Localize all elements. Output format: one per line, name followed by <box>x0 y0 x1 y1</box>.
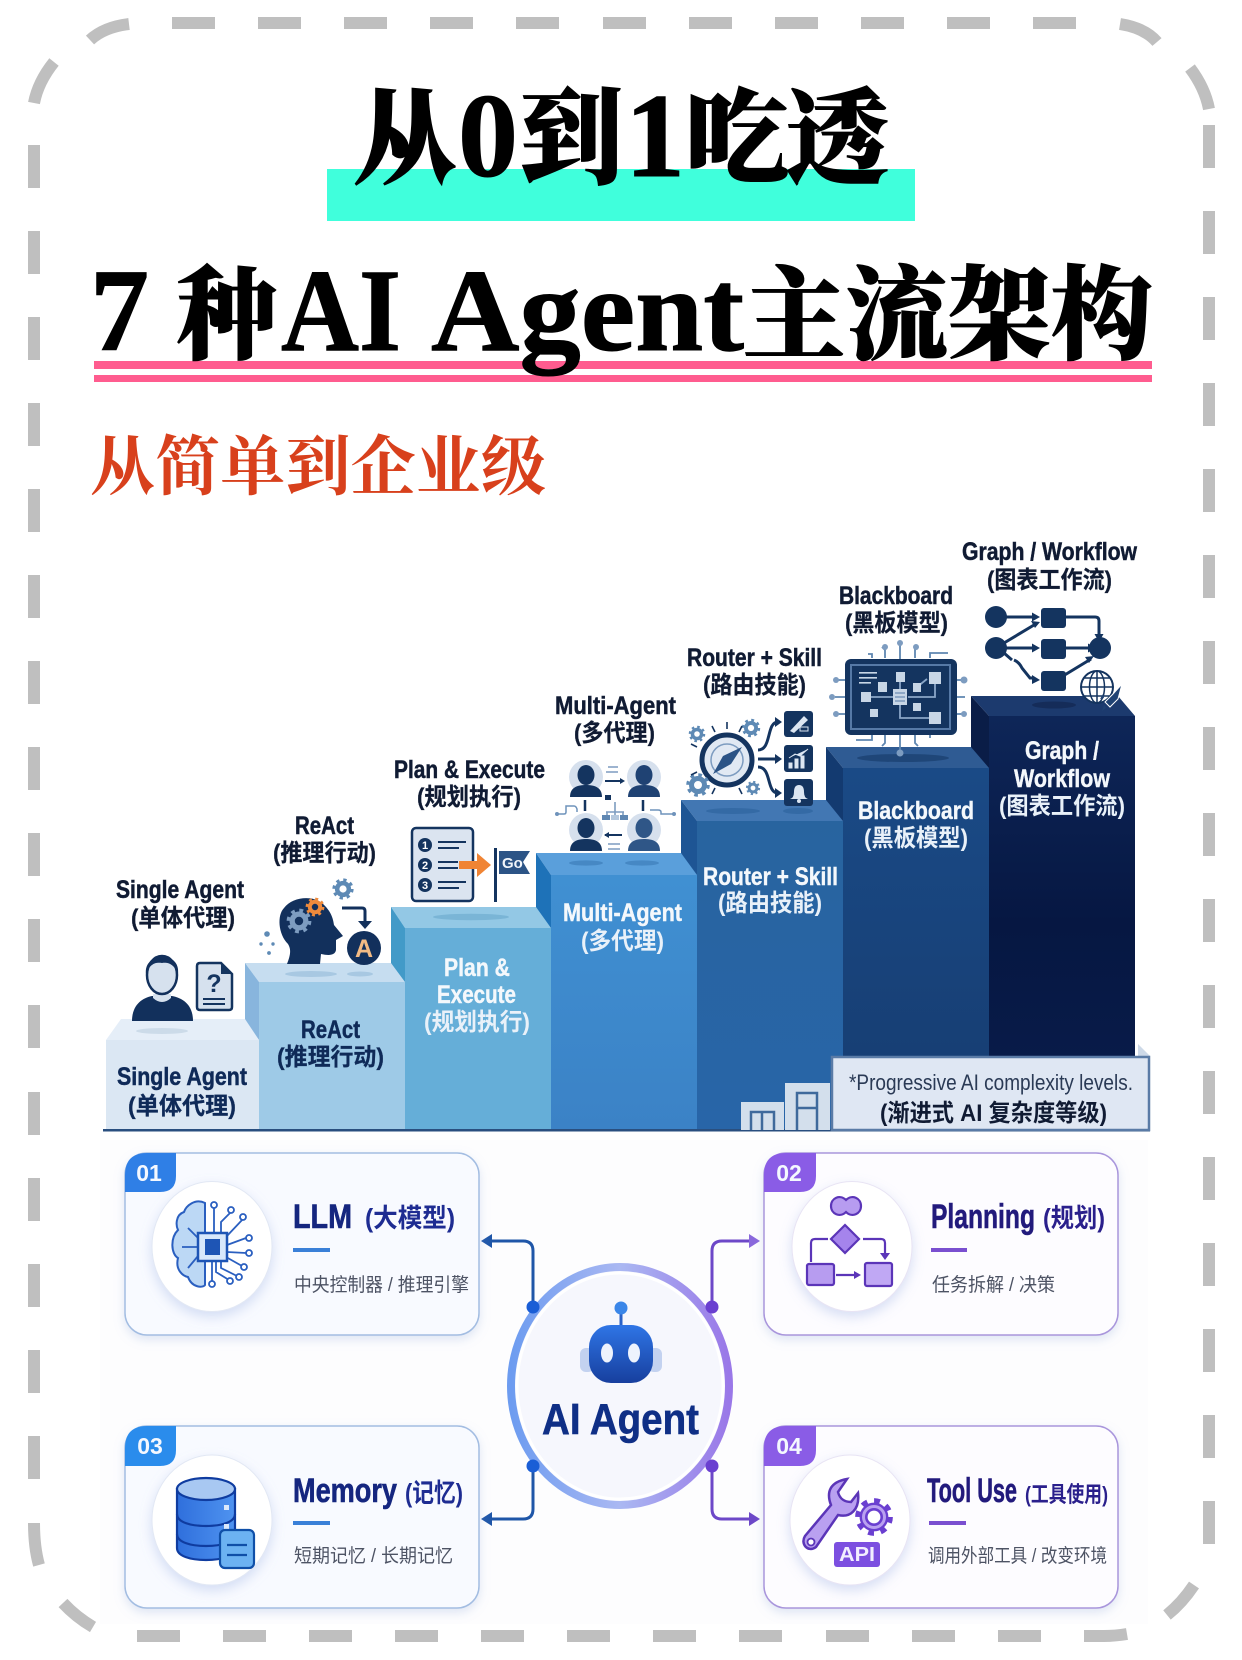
label: blackboard <box>839 582 953 637</box>
label: single agent: (单体代理) <box>131 905 235 932</box>
card 01: LLM <box>125 1153 479 1335</box>
label: single agent <box>116 876 245 932</box>
label: single agent: Single Agent <box>116 876 245 904</box>
icon: database <box>177 1478 254 1568</box>
title line 2: 主流架构 <box>743 261 1153 374</box>
step 5 router + skill: Router + Skill <box>703 863 838 891</box>
card 01: LLM: LLM <box>293 1198 352 1236</box>
note box: *Progressive AI complexity levels. <box>849 1070 1133 1095</box>
card 02: planning: (规划) <box>1043 1203 1105 1233</box>
card 01: LLM: 01 <box>136 1160 162 1186</box>
card 02: planning: 任务拆解 / 决策 <box>932 1274 1055 1296</box>
card 02: planning: Planning <box>931 1198 1035 1236</box>
title <box>90 69 1153 382</box>
card 04: tool use: 04 <box>776 1433 802 1459</box>
connector: LLM <box>481 1234 533 1307</box>
label: router + skill <box>687 644 822 699</box>
step 6 blackboard <box>826 747 989 1130</box>
title line 1: 吃 <box>685 83 789 198</box>
label: blackboard: Blackboard <box>839 582 953 610</box>
label: router + skill: Router + Skill <box>687 644 822 672</box>
card 02: planning <box>764 1153 1118 1335</box>
title line 1: 从 <box>353 83 457 198</box>
baseline <box>103 1129 1150 1132</box>
connector: memory <box>481 1466 533 1526</box>
note box: (渐进式 AI 复杂度等级) <box>880 1100 1107 1127</box>
step 1 single agent: (单体代理) <box>128 1093 236 1120</box>
step 4 multi-agent: (多代理) <box>581 928 664 955</box>
title line 1: 0 <box>458 69 518 202</box>
step 6 blackboard: (黑板模型) <box>864 825 968 852</box>
step 3 plan & execute <box>391 907 551 1130</box>
step 1 single agent: Single Agent <box>117 1063 248 1091</box>
step 7 graph / workflow: Graph / <box>1025 737 1099 765</box>
title line 2: 种 <box>176 261 278 374</box>
title line 1: 到 <box>519 83 623 198</box>
icon: four agents network <box>555 760 676 851</box>
title line 1 <box>353 69 889 202</box>
icon: numbered list and go flag <box>412 828 530 902</box>
step 4 multi-agent <box>536 853 697 1130</box>
card 03: memory <box>125 1426 479 1608</box>
title line 2 <box>90 245 1153 376</box>
card 04: tool use: Tool Use <box>927 1472 1017 1510</box>
step 3 plan & execute: Plan & <box>444 954 510 982</box>
card 03: memory: 03 <box>137 1433 163 1459</box>
icon: numbered list and go flag: 2 <box>422 860 428 872</box>
step 3 plan & execute: (规划执行) <box>424 1009 530 1036</box>
step 6 blackboard: Blackboard <box>858 797 974 825</box>
icon: head with gears <box>259 880 381 965</box>
step 3 plan & execute: Execute <box>437 981 516 1009</box>
connector: tool use <box>712 1466 760 1526</box>
label: plan & execute <box>394 756 545 811</box>
architecture components panel <box>100 1140 1148 1624</box>
connector: planning <box>712 1234 760 1307</box>
step 4 multi-agent: Multi-Agent <box>563 899 683 927</box>
icon: planning flow <box>807 1197 892 1286</box>
icon: numbered list and go flag: 1 <box>422 840 428 852</box>
card 03: memory: 短期记忆 / 长期记忆 <box>294 1545 453 1567</box>
step 2 react: ReAct <box>301 1016 361 1044</box>
label: graph / workflow: (图表工作流) <box>987 567 1112 594</box>
label: react: ReAct <box>295 812 355 840</box>
label: blackboard: (黑板模型) <box>845 610 948 637</box>
icon: person with question document: ? <box>206 970 222 998</box>
panel background <box>100 1140 1148 1624</box>
icon: person with question document <box>132 956 232 1021</box>
label: multi-agent: (多代理) <box>574 720 655 747</box>
title pink double underline <box>94 361 1152 382</box>
small buildings <box>741 1083 830 1130</box>
icon: numbered list and go flag: 3 <box>422 880 428 892</box>
icon: head with gears: A <box>355 935 373 963</box>
icon: robot <box>580 1302 662 1383</box>
icon: numbered list and go flag: Go <box>502 855 523 872</box>
label: react: (推理行动) <box>273 840 376 867</box>
icon: compass router with skills <box>688 711 813 806</box>
step 2 react: (推理行动) <box>277 1044 384 1071</box>
step 1 single agent <box>106 1019 259 1130</box>
card 04: tool use: (工具使用) <box>1025 1482 1108 1507</box>
label: react <box>273 812 376 867</box>
label: plan & execute: Plan & Execute <box>394 756 545 784</box>
step 7 graph / workflow: Workflow <box>1014 765 1110 793</box>
step 7 graph / workflow <box>971 696 1135 1130</box>
step 5 router + skill: (路由技能) <box>718 890 822 917</box>
label: graph / workflow: Graph / Workflow <box>962 538 1137 566</box>
card 01: LLM: 中央控制器 / 推理引擎 <box>294 1274 469 1296</box>
icon: workflow graph with globe and rocket <box>985 606 1122 711</box>
title line 2: 7 <box>90 245 149 376</box>
step 2 react <box>245 963 405 1130</box>
card 04: tool use <box>764 1426 1118 1608</box>
icon: wrench, gear and api tag: API <box>839 1544 875 1566</box>
icon: blackboard tablet <box>829 640 968 756</box>
central AI agent hub <box>511 1267 729 1505</box>
label: router + skill: (路由技能) <box>703 672 806 699</box>
label: graph / workflow <box>962 538 1137 594</box>
card 01: LLM: (大模型) <box>365 1203 455 1233</box>
title highlight bar <box>327 169 915 221</box>
title line 2: AI <box>281 245 401 376</box>
title line 1: 透 <box>786 83 889 198</box>
step 5 router + skill <box>681 800 843 1130</box>
label: multi-agent <box>555 692 677 747</box>
central AI agent hub: AI Agent <box>542 1395 699 1444</box>
card 03: memory: Memory <box>293 1472 397 1510</box>
subtitle: 从简单到企业级 <box>90 432 546 504</box>
label: multi-agent: Multi-Agent <box>555 692 677 720</box>
card 04: tool use: 调用外部工具 / 改变环境 <box>928 1545 1107 1567</box>
title line 2: Agent <box>431 245 744 376</box>
icon: wrench, gear and api tag <box>803 1479 890 1567</box>
icon: brain chip <box>172 1201 252 1287</box>
note box <box>832 1044 1150 1130</box>
card 03: memory: (记忆) <box>405 1478 463 1508</box>
title line 1: 1 <box>625 69 685 202</box>
card 02: planning: 02 <box>776 1160 802 1186</box>
staircase chart <box>103 538 1150 1132</box>
step 7 graph / workflow: (图表工作流) <box>999 793 1125 820</box>
label: plan & execute: (规划执行) <box>417 784 521 811</box>
